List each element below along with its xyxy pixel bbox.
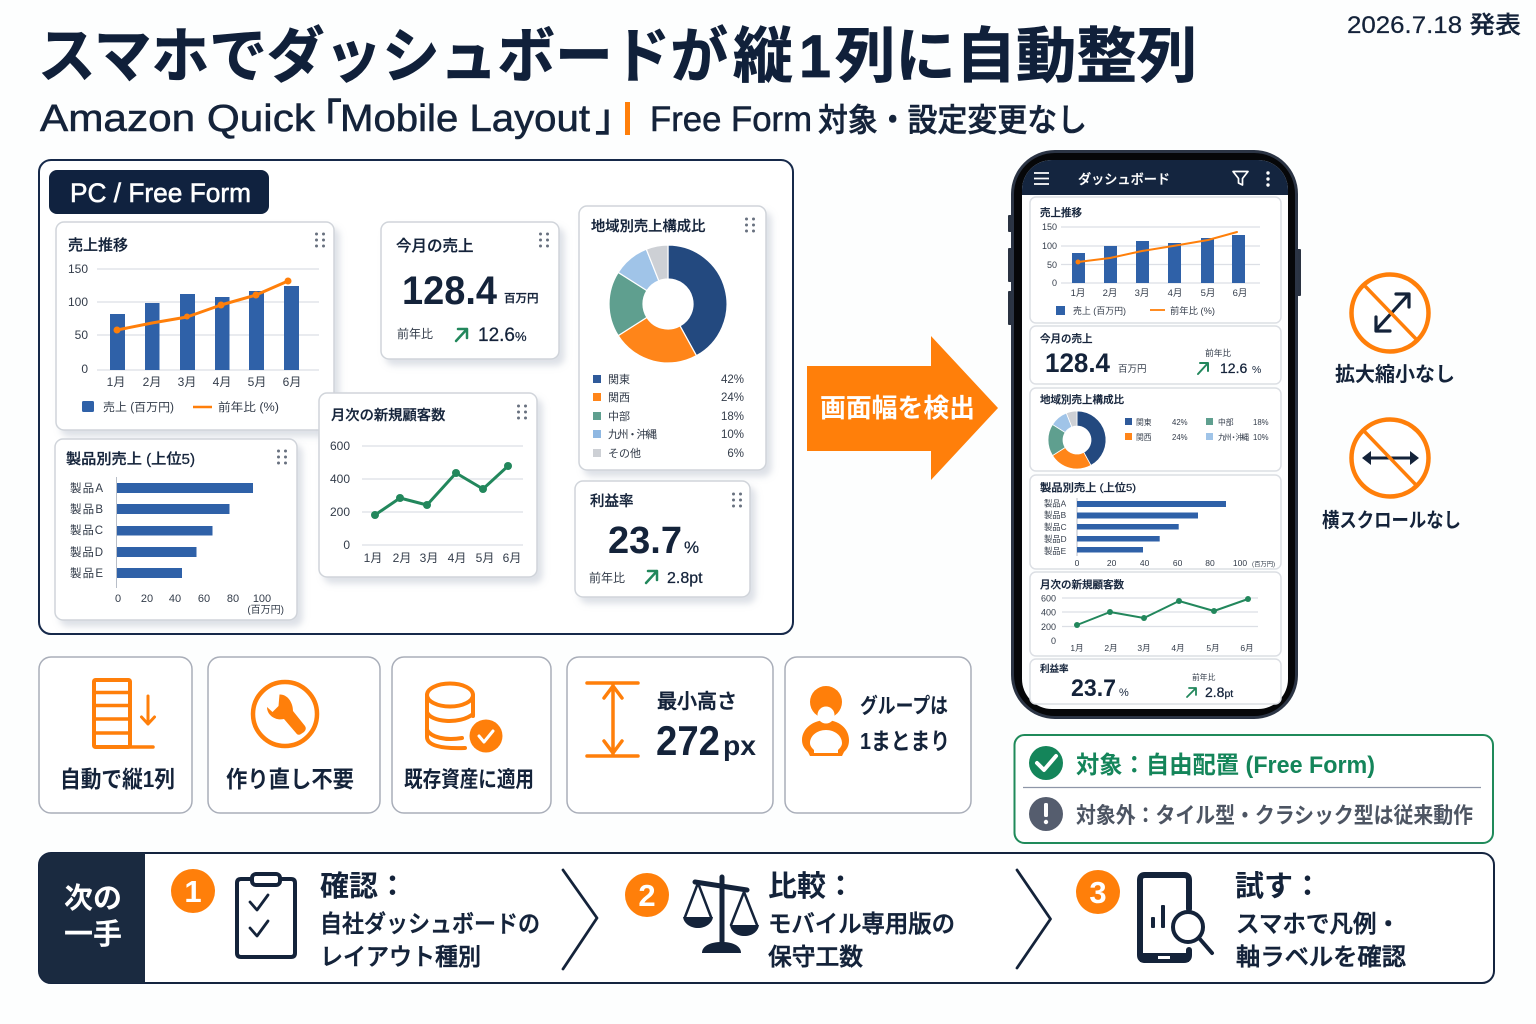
phone card: regional composition: 中部	[1218, 417, 1234, 427]
card: product sales: 40	[169, 593, 181, 605]
status box: scope: 対象外：タイル型・クラシック型は従来動作	[1076, 803, 1473, 828]
card: product sales: 80	[227, 593, 239, 605]
icon: phone with magnifier	[1140, 875, 1212, 962]
card: profit margin: 2.8pt	[667, 570, 703, 587]
phone card: regional composition: 42%	[1172, 418, 1188, 427]
card: sales trend: 売上 (百万円)	[103, 401, 174, 414]
phone card: product sales	[1030, 475, 1281, 569]
phone card: new customers: 月次の新規顧客数	[1040, 578, 1124, 591]
card: new customers: 2月	[393, 551, 411, 565]
phone card: regional composition: 24%	[1172, 433, 1188, 442]
phone card: regional composition: 九州・沖縄	[1218, 432, 1249, 442]
phone card: monthly sales KPI: 前年比	[1205, 347, 1231, 358]
feature card: auto single column	[39, 657, 192, 813]
phone card: profit margin: 利益率	[1040, 663, 1069, 675]
phone card: product sales: 20	[1107, 558, 1117, 568]
phone card: profit margin: 2.8pt	[1205, 684, 1233, 700]
feature card: minimum height	[567, 657, 773, 813]
card: regional composition: その他	[608, 447, 641, 460]
card: new customers	[319, 393, 537, 577]
card: product sales: 製品別売上 (上位5)	[66, 451, 195, 468]
phone card: product sales: 製品D	[1044, 534, 1067, 544]
card: sales trend: 5月	[248, 375, 266, 389]
card: product sales: 100	[253, 593, 271, 605]
phone card: new customers: 6月	[1240, 643, 1254, 653]
phone card: monthly sales KPI: 12.6	[1220, 360, 1247, 376]
phone card: regional composition: 関西	[1136, 433, 1152, 442]
card: monthly sales KPI: 12.6%	[478, 325, 527, 346]
feature card: group stays together: グループは	[860, 694, 948, 718]
card: monthly sales KPI	[381, 222, 559, 359]
card: regional composition: 10%	[721, 429, 744, 441]
card: profit margin: %	[684, 538, 699, 557]
phone card: sales trend: 前年比 (%)	[1170, 305, 1215, 316]
card: sales trend: 100	[68, 295, 88, 309]
icon: height measure	[587, 683, 638, 756]
phone card: new customers: 400	[1041, 608, 1056, 618]
phone card: new customers: 600	[1041, 594, 1056, 604]
feature card: minimum height: 272	[656, 717, 720, 764]
title: 1	[799, 23, 831, 90]
card: sales trend	[56, 222, 334, 430]
icon: no horizontal scroll	[1352, 420, 1428, 496]
phone card: new customers: 2月	[1104, 643, 1118, 653]
panel: PC Free Form	[39, 160, 793, 634]
card: regional composition: 中部	[608, 410, 630, 423]
phone card: product sales: 80	[1205, 558, 1215, 568]
card: new customers: 月次の新規顧客数	[331, 407, 445, 424]
phone card: sales trend: 3月	[1135, 288, 1149, 299]
card: sales trend: 50	[75, 328, 88, 342]
step 1: 自社ダッシュボードの	[320, 911, 540, 938]
step 3: 軸ラベルを確認	[1236, 944, 1406, 971]
phone card: product sales: 製品E	[1044, 546, 1067, 556]
card: regional composition: 関東	[608, 373, 630, 386]
card: monthly sales KPI: 百万円	[504, 292, 538, 305]
phone card: regional composition: 地域別売上構成比	[1040, 393, 1124, 406]
card: sales trend: 売上推移	[68, 237, 128, 254]
card: product sales: 製品B	[70, 502, 103, 516]
subtitle: Mobile Layout	[340, 98, 590, 140]
title	[38, 23, 1197, 90]
feature card: minimum height: px	[723, 730, 756, 761]
card: new customers: 6月	[503, 551, 521, 565]
card: product sales: 製品C	[70, 523, 103, 537]
step 1: 確認：	[320, 870, 407, 903]
phone card: product sales: 製品A	[1044, 498, 1067, 508]
status box: scope: 対象：自由配置 (Free Form)	[1076, 752, 1375, 779]
next steps label: 次の	[64, 882, 122, 915]
phone card: product sales: 60	[1173, 558, 1183, 568]
card: monthly sales KPI: 前年比	[397, 326, 433, 341]
phone card: profit margin: 23.7	[1071, 675, 1116, 702]
phone card: product sales: 製品B	[1044, 510, 1067, 520]
step 3	[1076, 870, 1406, 971]
step 2	[625, 870, 955, 971]
subtitle: 対象・設定変更なし	[818, 102, 1087, 138]
phone card: new customers: 3月	[1137, 643, 1151, 653]
feature card: applies to existing assets	[392, 657, 551, 813]
card: regional composition: 関西	[608, 391, 630, 404]
phone card: monthly sales KPI: 今月の売上	[1040, 332, 1092, 345]
card: product sales: (百万円)	[247, 604, 284, 616]
feature card: group stays together	[785, 657, 971, 813]
phone card: product sales: 製品C	[1044, 522, 1067, 532]
badge: PC / Free Form: PC / Free Form	[70, 178, 251, 208]
title: 縦	[733, 23, 793, 90]
card: regional composition	[579, 206, 766, 470]
card: product sales: 製品E	[70, 566, 103, 580]
feature card: applies to existing assets: 既存資産に適用	[404, 767, 534, 792]
phone card: new customers: 4月	[1171, 643, 1185, 653]
phone header bar: ダッシュボード	[1078, 171, 1170, 187]
phone card: sales trend: 4月	[1168, 288, 1182, 299]
step 1: 1	[184, 874, 202, 909]
card: product sales: 20	[141, 593, 153, 605]
phone mockup	[1008, 150, 1301, 719]
step 2: モバイル専用版の	[768, 911, 955, 938]
step 2: 2	[638, 878, 656, 913]
card: regional composition: 18%	[721, 411, 744, 423]
phone card: product sales: 100	[1233, 558, 1247, 568]
donut chart	[609, 245, 727, 363]
card: new customers: 400	[330, 472, 350, 486]
phone card: sales trend	[1030, 197, 1281, 323]
feature card: group stays together: 1まとまり	[860, 728, 950, 754]
feature card: minimum height: 最小高さ	[657, 690, 737, 713]
icon: wrench	[253, 682, 317, 746]
phone card: regional composition: 18%	[1253, 418, 1269, 427]
phone card: sales trend: 0	[1052, 278, 1057, 288]
phone card: sales trend: 2月	[1103, 288, 1117, 299]
card: new customers: 200	[330, 505, 350, 519]
card: sales trend: 2月	[143, 375, 161, 389]
icon: exclamation	[1029, 797, 1063, 831]
phone card: sales trend: 売上 (百万円)	[1073, 305, 1126, 316]
step 3: スマホで凡例・	[1236, 911, 1400, 938]
phone card: product sales: 40	[1140, 558, 1150, 568]
phone card: product sales: 0	[1075, 558, 1080, 568]
card: profit margin: 利益率	[590, 493, 634, 510]
badge: PC / Free Form	[49, 170, 269, 214]
status box: scope	[1014, 735, 1493, 843]
card: new customers: 5月	[476, 551, 494, 565]
title: 列に自動整列	[835, 23, 1197, 90]
feature card: no rebuild	[208, 657, 380, 813]
phone card: new customers: 5月	[1206, 643, 1220, 653]
phone card: monthly sales KPI: %	[1252, 364, 1261, 376]
card: sales trend: 6月	[283, 375, 301, 389]
phone card: profit margin: 前年比	[1192, 672, 1216, 682]
phone card: monthly sales KPI	[1030, 326, 1281, 384]
icon: stacked rows with down arrow	[94, 680, 154, 747]
icon: balance scale	[683, 877, 759, 953]
step 1	[171, 869, 540, 971]
card: new customers: 600	[330, 439, 350, 453]
card: regional composition: 九州・沖縄	[608, 428, 657, 441]
card: new customers: 0	[343, 538, 350, 552]
phone card: product sales: 製品別売上 (上位5)	[1040, 481, 1136, 494]
subtitle	[40, 98, 1087, 140]
card: profit margin: 前年比	[589, 570, 625, 585]
step 1: レイアウト種別	[320, 944, 481, 971]
step 3: 3	[1089, 875, 1107, 910]
phone card: monthly sales KPI: 128.4	[1045, 348, 1110, 378]
phone card: sales trend: 100	[1042, 241, 1057, 251]
arrow: step 2 to 3	[1017, 870, 1050, 968]
phone donut chart	[1048, 411, 1106, 469]
publication date: 2026.7.18 発表	[1347, 12, 1521, 39]
next steps label: 一手	[64, 918, 122, 951]
card: profit margin: 23.7	[608, 520, 682, 562]
card: product sales: 製品D	[70, 545, 103, 559]
label: no horizontal scroll: 横スクロールなし	[1322, 509, 1461, 532]
card: product sales	[55, 439, 297, 620]
card: product sales: 製品A	[70, 481, 103, 495]
phone card: new customers: 0	[1051, 636, 1056, 646]
card: new customers: 3月	[420, 551, 438, 565]
subtitle: Amazon Quick	[40, 98, 316, 140]
phone card: profit margin: %	[1119, 687, 1129, 699]
phone card: product sales: (百万円)	[1252, 560, 1275, 568]
icon: database with check	[427, 684, 502, 752]
card: product sales: 60	[198, 593, 210, 605]
phone card: monthly sales KPI: 百万円	[1118, 364, 1147, 375]
phone card: new customers	[1030, 572, 1281, 656]
label: no zoom: 拡大縮小なし	[1335, 363, 1455, 386]
card: regional composition: 地域別売上構成比	[591, 217, 705, 235]
card: sales trend: 1月	[107, 375, 125, 389]
phone card: profit margin	[1030, 659, 1281, 704]
phone card: sales trend: 6月	[1233, 288, 1247, 299]
phone header bar	[1022, 160, 1288, 195]
step 3: 試す：	[1235, 870, 1322, 903]
step 2: 比較：	[768, 870, 855, 903]
phone card: new customers: 1月	[1070, 643, 1084, 653]
card: product sales: 0	[115, 593, 121, 605]
card: new customers: 1月	[364, 551, 382, 565]
subtitle: 「	[304, 98, 342, 140]
title: スマホでダッシュボードが	[38, 23, 728, 90]
icon: no zoom	[1352, 274, 1428, 352]
card: regional composition: 24%	[721, 392, 744, 404]
card: profit margin	[575, 481, 750, 597]
card: regional composition: 42%	[721, 374, 744, 386]
subtitle: Free Form	[650, 100, 812, 139]
phone card: sales trend: 5月	[1201, 288, 1215, 299]
phone card: new customers: 200	[1041, 622, 1056, 632]
phone card: sales trend: 1月	[1071, 288, 1085, 299]
icon: check	[1029, 746, 1063, 780]
card: regional composition: 6%	[727, 448, 744, 460]
feature card: auto single column: 自動で縦1列	[60, 766, 175, 792]
panel: next steps	[39, 853, 1494, 983]
card: sales trend: 3月	[178, 375, 196, 389]
card: monthly sales KPI: 今月の売上	[396, 237, 474, 255]
phone card: sales trend: 150	[1042, 222, 1057, 232]
arrow: detect screen width	[807, 336, 998, 480]
icon: person group	[802, 686, 849, 756]
step 2: 保守工数	[768, 944, 863, 971]
phone card: regional composition: 10%	[1253, 433, 1269, 442]
card: sales trend: 4月	[213, 375, 231, 389]
subtitle: 」	[595, 98, 633, 140]
arrow: detect screen width: 画面幅を検出	[820, 393, 975, 423]
card: sales trend: 0	[81, 362, 88, 376]
phone card: regional composition: 関東	[1136, 417, 1152, 427]
phone card: sales trend: 売上推移	[1040, 206, 1082, 219]
next steps label	[39, 853, 145, 983]
card: sales trend: 前年比 (%)	[218, 400, 279, 414]
phone card: sales trend: 50	[1047, 260, 1057, 270]
arrow: step 1 to 2	[563, 870, 597, 969]
card: new customers: 4月	[448, 551, 466, 565]
card: sales trend: 150	[68, 262, 88, 276]
feature card: no rebuild: 作り直し不要	[226, 766, 354, 792]
icon: clipboard	[237, 874, 295, 957]
card: monthly sales KPI: 128.4	[402, 269, 498, 313]
phone card: regional composition	[1030, 388, 1281, 471]
